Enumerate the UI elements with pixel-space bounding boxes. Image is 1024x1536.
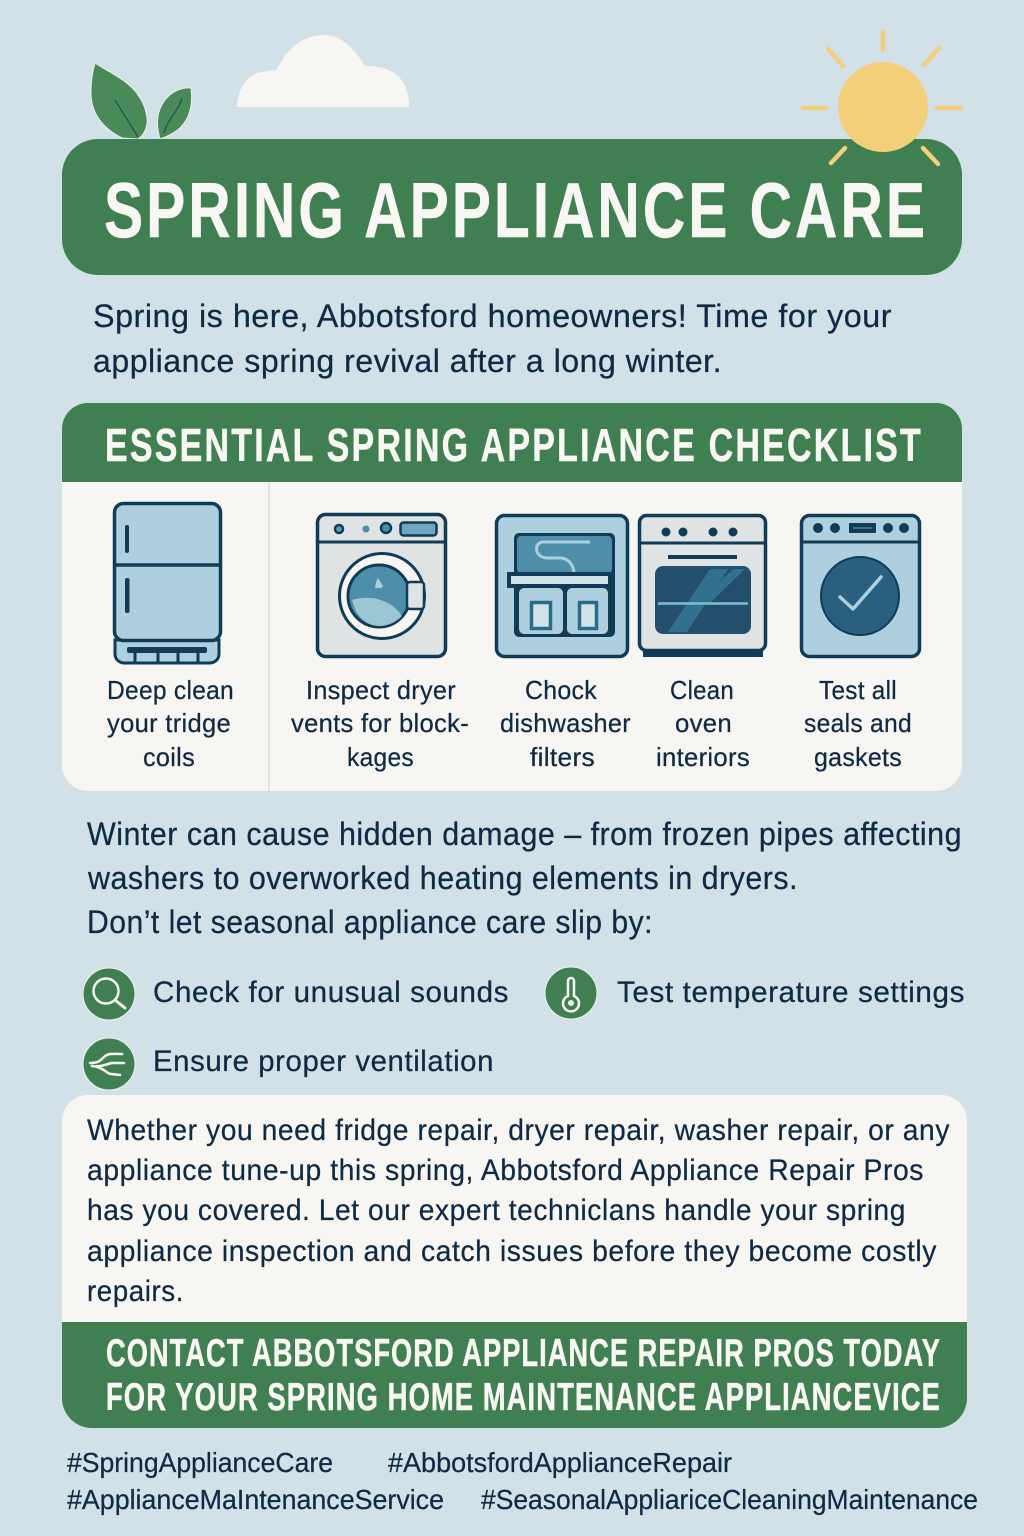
icon: dryer bbox=[318, 514, 446, 656]
winter damage text: Winter can cause hidden damage – from frozen pipes affecting bbox=[87, 816, 962, 852]
label: dishwasher: filters bbox=[530, 742, 595, 772]
label: seals bbox=[804, 675, 912, 772]
label: oven: Clean bbox=[670, 675, 734, 705]
intro text: appliance spring revival after a long winter. bbox=[93, 343, 722, 379]
hashtags: #SeasonalAppliariceCleaningMaintenance bbox=[481, 1484, 978, 1515]
bullet: temperature: Test temperature settings bbox=[617, 976, 965, 1009]
title banner bbox=[62, 139, 962, 275]
winter damage text bbox=[87, 816, 962, 940]
label: fridge: coils bbox=[143, 742, 195, 772]
winter damage text: washers to overworked heating elements in dryers. bbox=[87, 860, 798, 896]
hashtags: #AbbotsfordApplianceRepair bbox=[388, 1447, 732, 1478]
icon: cloud bbox=[237, 35, 409, 107]
panel: checklist bbox=[62, 403, 962, 791]
service paragraph: appliance inspection and catch issues before they become costly bbox=[87, 1235, 937, 1268]
icon: seal check bbox=[802, 516, 920, 656]
label: dryer: kages bbox=[347, 742, 414, 772]
icon: dishwasher bbox=[496, 516, 628, 656]
hashtags bbox=[67, 1447, 978, 1515]
icon: sun bbox=[803, 32, 961, 164]
label: dryer: Inspect dryer bbox=[306, 675, 456, 705]
label: seals: Test all bbox=[819, 675, 897, 705]
intro text: Spring is here, Abbotsford homeowners! Time for your bbox=[93, 298, 892, 334]
service paragraph: has you covered. Let our expert techniclans handle your spring bbox=[87, 1194, 906, 1227]
label: dryer bbox=[291, 675, 469, 772]
bullet: ventilation: Ensure proper ventilation bbox=[153, 1045, 494, 1078]
bullet: sounds: Check for unusual sounds bbox=[153, 976, 509, 1009]
contact banner text bbox=[106, 1332, 941, 1419]
service paragraph: appliance tune-up this spring, Abbotsford Appliance Repair Pros bbox=[87, 1154, 924, 1187]
winter damage text: Don’t let seasonal appliance care slip by: bbox=[87, 904, 653, 940]
hashtags: #SpringApplianceCare bbox=[67, 1447, 333, 1478]
label: dishwasher: Chock bbox=[525, 675, 598, 705]
bullet: sounds bbox=[83, 968, 509, 1020]
label: seals: gaskets bbox=[814, 742, 902, 772]
bullet: temperature bbox=[545, 967, 965, 1019]
icon: oven bbox=[640, 516, 766, 657]
icon: leaves bbox=[91, 63, 192, 139]
label: oven: interiors bbox=[656, 742, 750, 772]
label: dishwasher bbox=[500, 675, 631, 772]
icon: thermometer bbox=[545, 967, 597, 1019]
label: seals: seals and bbox=[804, 708, 912, 738]
bullet: ventilation bbox=[83, 1038, 494, 1090]
label: oven: oven bbox=[675, 708, 732, 738]
label: fridge bbox=[107, 675, 234, 772]
service paragraph: Whether you need fridge repair, dryer repair, washer repair, or any bbox=[87, 1114, 950, 1147]
service paragraph: repairs. bbox=[87, 1275, 184, 1308]
icon: magnifier bbox=[83, 968, 135, 1020]
service paragraph bbox=[87, 1114, 950, 1308]
label: fridge: your tridge bbox=[107, 708, 231, 738]
label: oven bbox=[656, 675, 750, 772]
icon: fridge bbox=[114, 504, 221, 663]
hashtags: #ApplianceMaIntenanceService bbox=[67, 1484, 444, 1515]
label: dryer: vents for block- bbox=[291, 708, 469, 738]
label: dishwasher: dishwasher bbox=[500, 708, 631, 738]
intro text bbox=[93, 298, 892, 379]
icon: vent bbox=[83, 1038, 135, 1090]
label: fridge: Deep clean bbox=[107, 675, 234, 705]
panel: call to action bbox=[62, 1095, 967, 1428]
